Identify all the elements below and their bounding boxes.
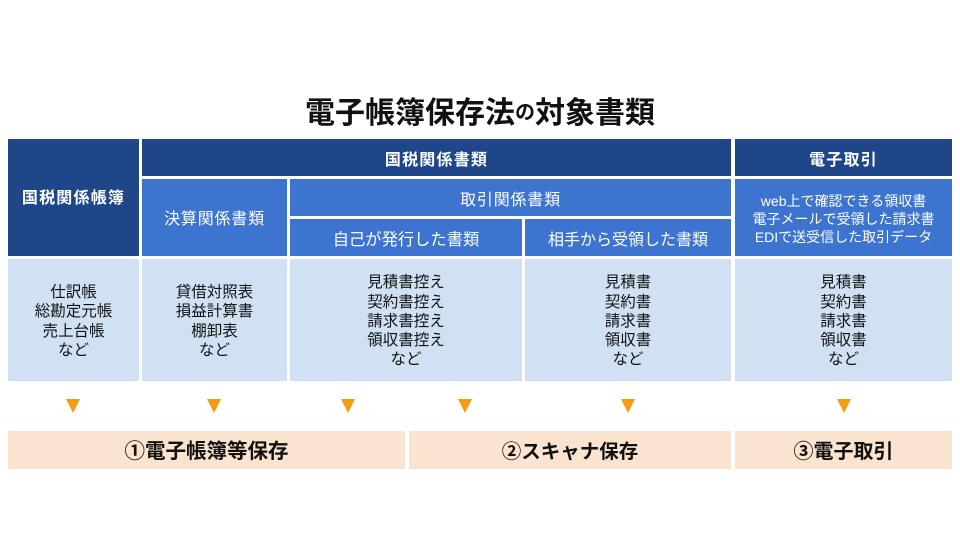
arrow 2 [207, 399, 221, 413]
result: ②スキャナ保存: ②スキャナ保存 [502, 440, 638, 462]
list: 電子取引の書類: など [828, 351, 859, 368]
list: 発行した書類: 領収書控え [367, 332, 445, 349]
list: 電子取引の書類: 契約書 [820, 294, 867, 311]
list: 帳簿: 仕訳帳 [50, 284, 97, 301]
list: 電子取引の書類: 領収書 [820, 332, 867, 349]
header: 国税関係帳簿 [8, 139, 139, 256]
header: 国税関係書類: 国税関係書類 [385, 152, 488, 168]
subheader: 決算関係書類: 決算関係書類 [164, 210, 265, 228]
result: ②スキャナ保存 [409, 431, 731, 469]
list: 決算書類: など [199, 342, 230, 359]
header: 国税関係書類 [142, 139, 731, 176]
subheader: 電子取引の内容: EDIで送受信した取引データ [755, 228, 932, 244]
list: 電子取引の書類: 見積書 [820, 274, 867, 291]
list: 電子取引の書類 [735, 259, 952, 381]
subheader: 自己が発行した書類: 自己が発行した書類 [333, 230, 479, 248]
result: ③電子取引 [735, 431, 952, 469]
header: 電子取引: 電子取引 [809, 152, 878, 168]
arrow 6 [837, 399, 851, 413]
list: 受領した書類: 領収書 [605, 332, 651, 349]
list: 決算書類 [142, 259, 287, 381]
list: 受領した書類: 請求書 [605, 313, 651, 330]
list: 決算書類: 損益計算書 [176, 303, 253, 320]
subheader: 電子取引の内容: 電子メールで受領した請求書 [752, 210, 934, 226]
list: 発行した書類: 見積書控え [367, 274, 445, 291]
list: 電子取引の書類: 請求書 [820, 313, 867, 330]
header: 電子取引 [735, 139, 952, 176]
subheader: 電子取引の内容 [735, 179, 952, 256]
list: 受領した書類: 契約書 [605, 294, 651, 311]
subheader: 取引関係書類 [290, 179, 731, 216]
list: 受領した書類 [525, 259, 731, 381]
arrow 3 [341, 399, 355, 413]
arrow 4 [458, 399, 472, 413]
list: 帳簿: 売上台帳 [42, 322, 104, 340]
subheader: 取引関係書類: 取引関係書類 [460, 192, 561, 208]
result: ①電子帳簿等保存: ①電子帳簿等保存 [124, 440, 288, 463]
result: ③電子取引: ③電子取引 [794, 440, 894, 462]
title: の [515, 102, 535, 124]
subheader: 自己が発行した書類 [290, 219, 522, 256]
list: 発行した書類: 請求書控え [367, 313, 445, 330]
list: 受領した書類: 見積書 [605, 274, 651, 291]
arrow 1 [66, 399, 80, 413]
header: 国税関係帳簿: 国税関係帳簿 [22, 190, 125, 207]
subheader: 相手から受領した書類: 相手から受領した書類 [548, 232, 708, 248]
result: ①電子帳簿等保存 [8, 431, 405, 469]
subheader: 電子取引の内容: web上で確認できる領収書 [761, 192, 926, 208]
list: 決算書類: 棚卸表 [191, 322, 238, 340]
list: 発行した書類: 契約書控え [367, 294, 445, 311]
list: 受領した書類: など [612, 351, 644, 368]
list: 帳簿 [8, 259, 139, 381]
subheader: 決算関係書類 [142, 179, 287, 256]
list: 発行した書類: など [390, 351, 422, 368]
arrow 5 [621, 399, 635, 413]
list: 帳簿: など [58, 342, 89, 359]
title: 電子帳簿保存法 対象書類 [305, 97, 655, 130]
subheader: 相手から受領した書類 [525, 219, 731, 256]
list: 発行した書類 [290, 259, 522, 381]
list: 帳簿: 総勘定元帳 [35, 303, 112, 320]
list: 決算書類: 貸借対照表 [176, 284, 253, 301]
